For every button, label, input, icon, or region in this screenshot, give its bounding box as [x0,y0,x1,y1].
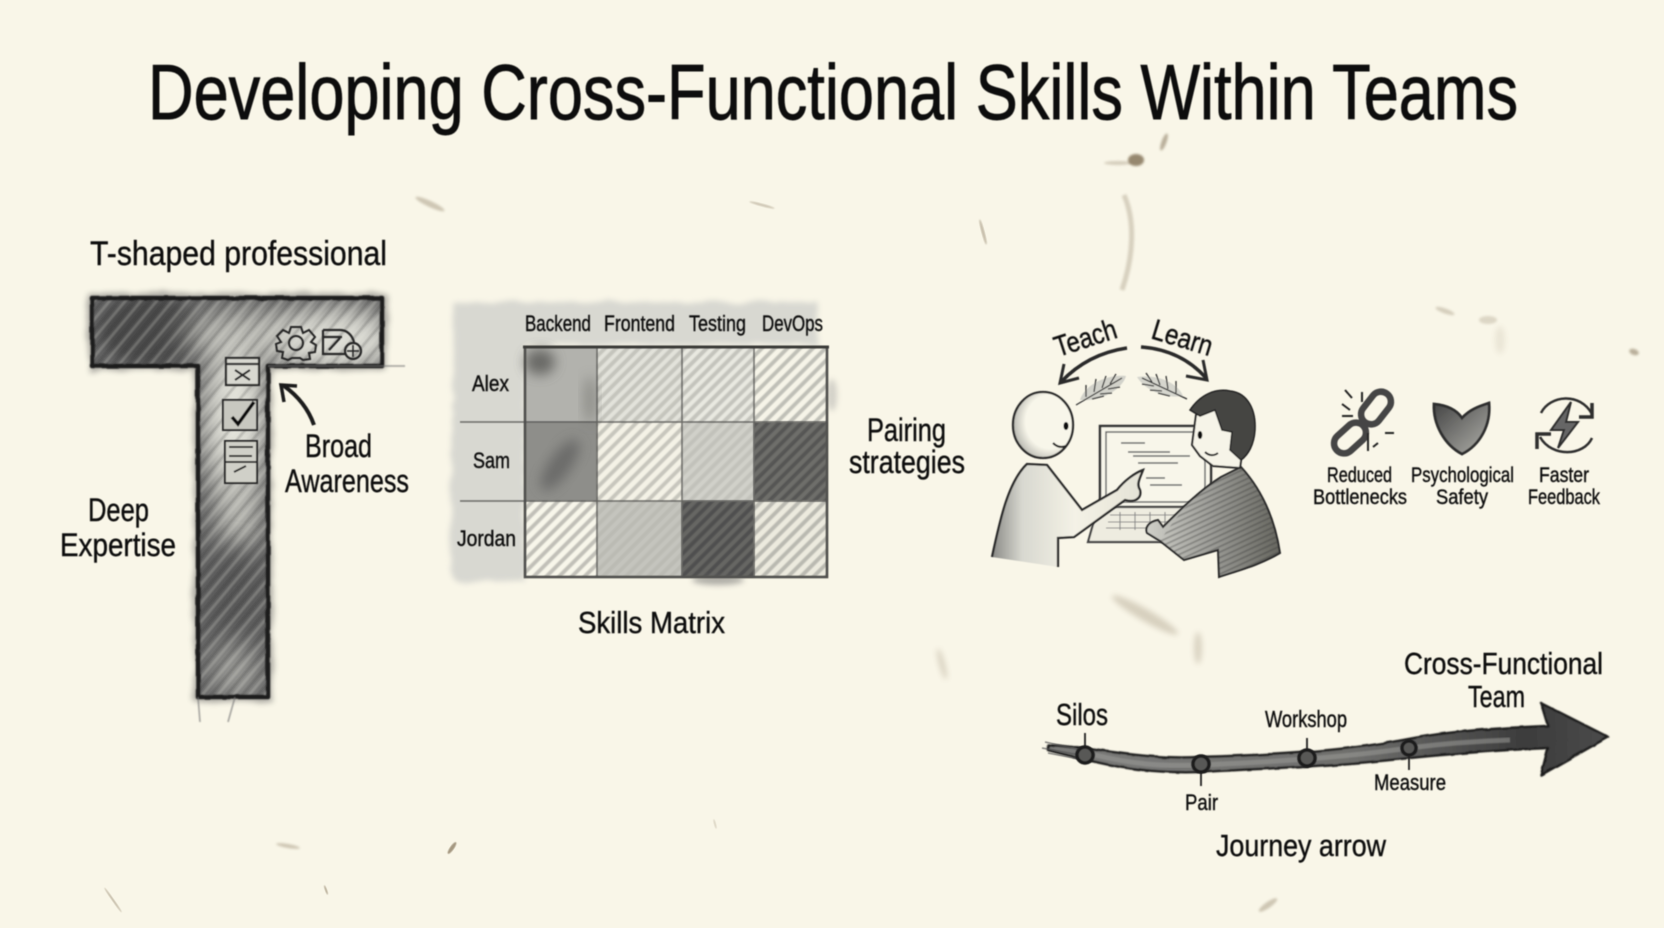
label: Deep Expertise: Deep [88,492,149,528]
icon: broken chain link [1330,388,1395,457]
timeline nodes [1077,733,1416,786]
matrix column labels: Frontend [604,311,675,336]
arrow: broad awareness pointer [281,385,314,425]
icon: heart shield [1434,403,1489,454]
matrix column labels [525,311,823,336]
icon: window with cloud [323,330,361,359]
heading: Pairing strategies: strategies [849,444,965,480]
label: Reduced Bottlenecks [1313,464,1407,509]
panel: benefits [1313,388,1600,509]
icon: right feather [1137,373,1187,399]
label: Reduced Bottlenecks: Reduced [1327,464,1392,487]
label: Faster Feedback [1528,464,1600,509]
matrix row labels: Sam [473,448,510,473]
matrix row labels: Jordan [457,526,516,551]
heading: Pairing strategies [849,412,965,480]
label: Learn: Learn [1148,314,1217,363]
icon: gear [276,327,316,360]
label: Broad Awareness: Broad [305,428,372,464]
label: Workshop: Workshop [1265,706,1347,732]
icon: left feather [1076,374,1126,405]
caption: Journey arrow: Journey arrow [1216,828,1387,863]
panel: skills matrix [450,302,837,640]
paper stains [104,133,1640,914]
label: Cross-Functional Team: Team [1468,679,1525,714]
panel: T-shaped professional [60,235,409,722]
label: Silos: Silos [1056,697,1108,732]
arrow: learn [1141,347,1207,380]
matrix column labels: Backend [525,311,591,336]
panel: journey arrow [1042,646,1608,863]
illustration: teacher figure [992,392,1143,567]
label: Measure: Measure [1374,770,1446,795]
icon: form document [225,441,257,483]
label: Psychological Safety: Safety [1436,486,1488,509]
matrix row labels: Alex [472,371,509,396]
matrix column labels: Testing [689,311,746,336]
matrix grid lines [460,347,829,577]
label: Deep Expertise [60,492,176,563]
matrix column labels: DevOps [762,311,823,336]
icon: check box [223,400,257,430]
label: Broad Awareness [285,428,409,499]
illustration: laptop [1088,426,1212,542]
arrow: journey [1042,703,1608,775]
label: Broad Awareness: Awareness [285,463,409,499]
heading: Pairing strategies: Pairing [867,412,946,448]
label: Faster Feedback: Faster [1539,464,1589,487]
matrix cells [525,347,837,585]
label: Psychological Safety [1411,464,1514,509]
matrix gray wash [450,302,818,582]
caption: Skills Matrix: Skills Matrix [578,605,725,640]
T shape [85,290,405,722]
label: Cross-Functional Team [1404,646,1603,714]
illustration: learner figure [1146,390,1280,577]
icon: lightning with cycle arrows [1537,398,1592,452]
label: Teach: Teach [1050,313,1121,364]
heading: T-shaped professional: T-shaped professional [90,235,387,273]
arrow: teach [1060,348,1127,383]
label: Deep Expertise: Expertise [60,527,176,563]
label: Psychological Safety: Psychological [1411,464,1514,487]
icon: window with cross [226,358,259,385]
matrix row labels [457,371,516,551]
label: Faster Feedback: Feedback [1528,486,1600,509]
label: Cross-Functional Team: Cross-Functional [1404,646,1603,681]
label: Pair: Pair [1185,790,1218,815]
label: Reduced Bottlenecks: Bottlenecks [1313,486,1407,509]
panel: pairing strategies [849,313,1280,577]
